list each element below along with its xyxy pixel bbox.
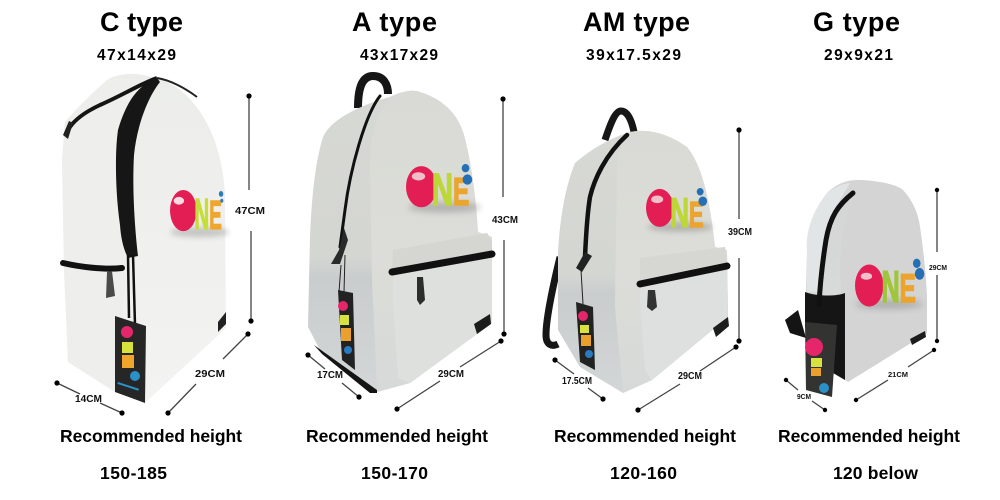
backpack: G type bbox=[785, 180, 927, 397]
height range: AM type: 120-160 bbox=[610, 463, 677, 483]
ONE logo bbox=[855, 259, 924, 312]
ONE logo: E bbox=[209, 192, 222, 238]
depth measure bbox=[552, 357, 606, 402]
heading: G type: G type bbox=[813, 7, 900, 37]
label patch bbox=[910, 331, 926, 345]
recommended height: C type: Recommended height bbox=[60, 426, 242, 446]
depth measure bbox=[784, 378, 827, 412]
height measure: 39CM bbox=[728, 227, 752, 238]
heading: A type: A type bbox=[352, 7, 437, 37]
height measure bbox=[492, 96, 518, 337]
depth measure bbox=[54, 380, 125, 416]
panel: A type bbox=[305, 7, 518, 483]
panel: C type bbox=[54, 7, 265, 483]
length measure bbox=[635, 344, 739, 413]
depth measure: 9CM bbox=[797, 394, 811, 401]
height measure: 29CM bbox=[929, 265, 947, 272]
ONE logo: N bbox=[432, 165, 453, 216]
depth measure bbox=[305, 352, 362, 400]
label patch bbox=[218, 312, 226, 332]
length measure: 29CM bbox=[438, 369, 464, 380]
height measure bbox=[728, 127, 752, 344]
recommended height: A type: Recommended height bbox=[306, 426, 488, 446]
length measure: 29CM bbox=[678, 371, 702, 382]
depth measure: 14CM bbox=[75, 394, 102, 405]
height measure bbox=[929, 188, 947, 343]
ONE logo bbox=[646, 188, 713, 236]
dimensions: C type: 47x14x29 bbox=[97, 47, 176, 64]
heading: AM type: AM type bbox=[583, 7, 690, 37]
ONE logo: E bbox=[900, 266, 916, 311]
height measure bbox=[235, 93, 265, 324]
depth measure: 17CM bbox=[317, 370, 343, 381]
recommended height: G type: Recommended height bbox=[778, 426, 960, 446]
ONE logo: E bbox=[689, 195, 704, 235]
panel: AM type bbox=[546, 7, 752, 483]
length measure bbox=[165, 331, 251, 416]
panel: G type bbox=[778, 7, 960, 483]
heading: C type: C type bbox=[100, 7, 183, 37]
recommended height: AM type: Recommended height bbox=[554, 426, 736, 446]
hang tag bbox=[576, 302, 595, 370]
height range: G type: 120 below bbox=[833, 463, 918, 483]
backpack: A type bbox=[308, 76, 492, 393]
height range: C type: 150-185 bbox=[100, 463, 167, 483]
hang tag bbox=[115, 316, 146, 403]
dimensions: AM type: 39x17.5x29 bbox=[586, 47, 681, 64]
backpack: C type bbox=[62, 74, 229, 403]
ONE logo bbox=[170, 190, 229, 239]
label patch bbox=[713, 317, 729, 337]
height measure: 43CM bbox=[492, 215, 518, 226]
height range: A type: 150-170 bbox=[361, 463, 428, 483]
length measure bbox=[854, 348, 936, 402]
length measure bbox=[394, 338, 504, 412]
ONE logo: E bbox=[453, 171, 469, 215]
depth measure: 17.5CM bbox=[562, 376, 592, 387]
ONE logo bbox=[406, 164, 481, 216]
dimensions: A type: 43x17x29 bbox=[360, 47, 438, 64]
hang tag bbox=[338, 290, 355, 370]
ONE logo: N bbox=[882, 261, 900, 312]
ONE logo: N bbox=[670, 190, 689, 236]
height measure: 47CM bbox=[235, 206, 265, 217]
label patch bbox=[474, 314, 491, 334]
backpack: AM type bbox=[546, 111, 729, 393]
ONE logo: N bbox=[194, 191, 209, 239]
hang tag bbox=[805, 322, 837, 397]
length measure: 21CM bbox=[888, 372, 908, 379]
dimensions: G type: 29x9x21 bbox=[824, 47, 893, 64]
length measure: 29CM bbox=[195, 369, 225, 380]
